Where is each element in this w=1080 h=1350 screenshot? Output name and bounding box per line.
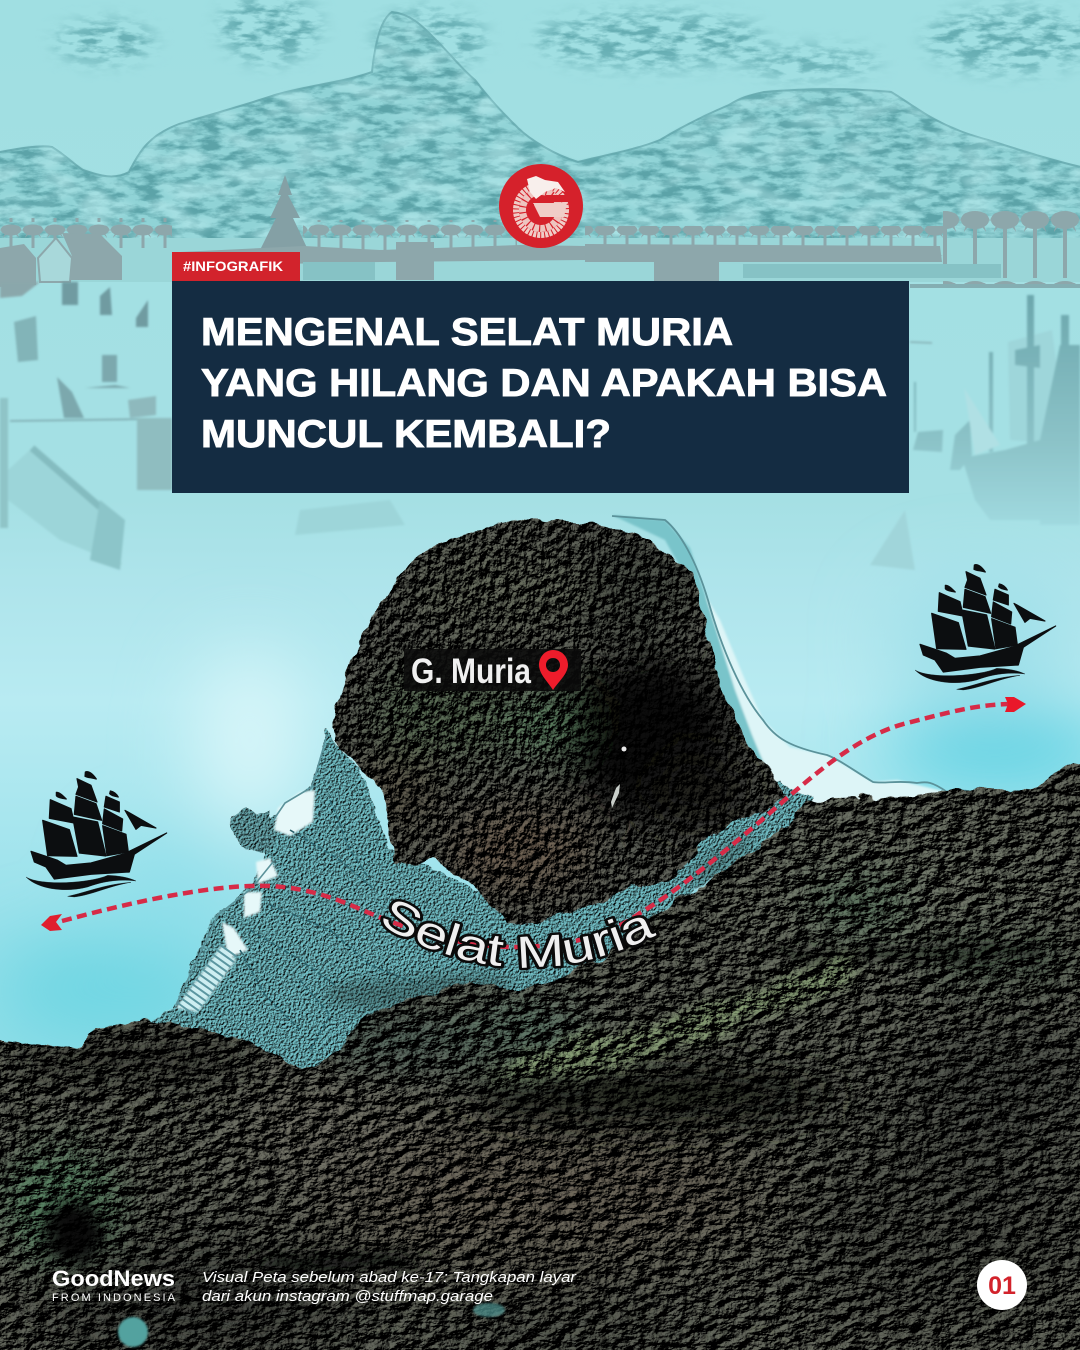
dashed sea route with arrows [41,697,1026,947]
title: MENGENAL SELAT MURIA [201,311,733,354]
clouds [55,0,1080,76]
eastern coast line [612,516,947,792]
title: YANG HILANG DAN APAKAH BISA [201,362,887,405]
map label: G. Muria: G. Muria [411,652,531,691]
title panel [172,281,909,493]
town silhouette [0,175,1080,288]
page number badge: 01 [988,1272,1016,1300]
mountains [0,12,1080,240]
icon: ship, east [915,565,1056,690]
small summit markers on the massif [611,746,626,808]
image credit caption: dari akun instagram @stuffmap.garage [202,1288,493,1305]
brand wordmark: GoodNews [52,1266,175,1291]
icon: ship, west [26,772,167,897]
Mount Muria massif [332,518,785,925]
teal lakes on the terrain [118,1303,505,1347]
boats on the left water [0,282,172,570]
lowland channels [240,800,420,1050]
page number badge [977,1260,1027,1310]
brand wordmark: FROM INDONESIA [52,1292,176,1304]
title: MUNCUL KEMBALI? [201,413,611,456]
sea colour variation and coastal glow [0,580,1080,1040]
western lowland: the former strait [150,730,812,1085]
engraving: historical port scene [0,0,1080,570]
title [201,311,887,456]
dark transition from lowland to hills [325,827,758,1011]
logo: red circular eagle emblem [499,164,583,248]
ships on the right water [295,295,1080,570]
brand wordmark [52,1266,176,1304]
white lagoon east of Muria [612,515,947,805]
icon: location pin [539,650,568,690]
southern mainland terrain [0,740,1080,1350]
map label: Selat Muria: Selat Muria [380,898,660,970]
image credit caption [202,1269,577,1305]
lagoons along the west coast [176,790,315,1012]
category tag [172,252,300,281]
image credit caption: Visual Peta sebelum abad ke-17: Tangkapan layar [202,1269,577,1286]
category tag: #INFOGRAFIK [183,258,283,274]
